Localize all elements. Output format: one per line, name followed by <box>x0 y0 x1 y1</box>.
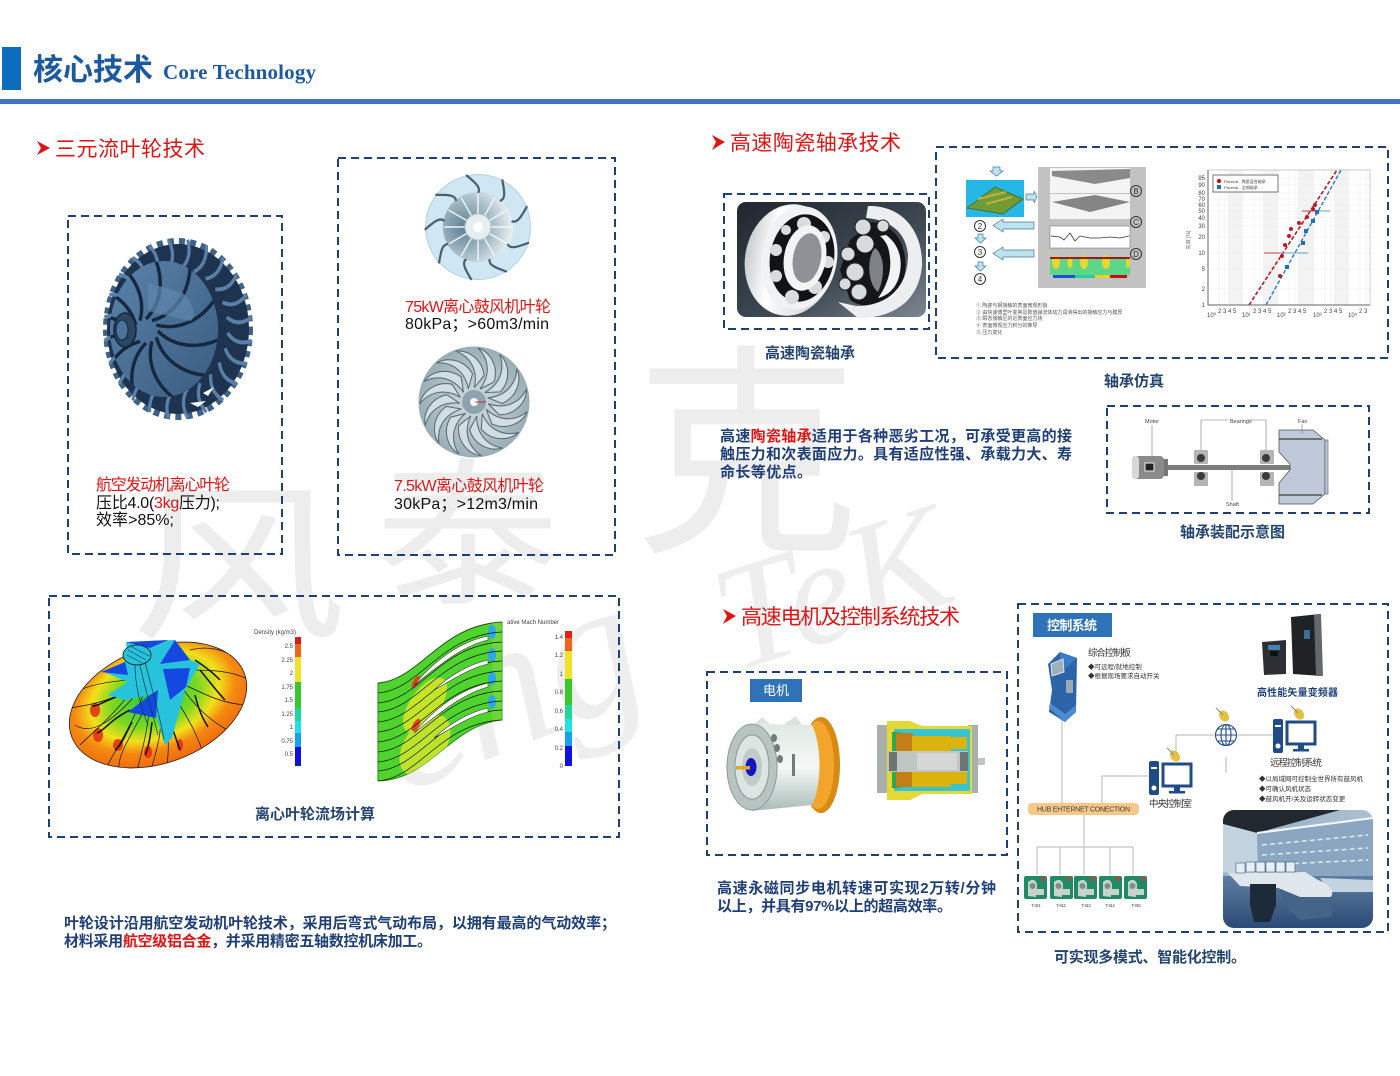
chart: Weibull life plot: 10⁴ <box>1348 312 1358 319</box>
chart: Weibull life plot: 10⁰ <box>1207 312 1217 319</box>
chart: Weibull life plot: 10 <box>1198 251 1206 257</box>
diagram: simulation workflow: D <box>1133 250 1139 259</box>
chart: relative Mach number contour <box>378 620 502 784</box>
chart: Weibull life plot <box>1185 170 1370 319</box>
text block: ceramic bearing advantages: 命长等优点。 <box>720 463 812 481</box>
caption: control summary: 可实现多模式、智能化控制。 <box>1054 948 1246 966</box>
text: simulation steps: ③ 瞬态接触区的近表面应力场 <box>976 315 1042 322</box>
icon: aero-engine centrifugal impeller <box>103 238 253 420</box>
chart: Weibull life plot: 失效 [%] <box>1185 230 1192 249</box>
legend: density: 1 <box>290 725 294 731</box>
legend: relative Mach number: 0.8 <box>555 690 564 696</box>
text block: impeller design: 材料采用航空级铝合金，并采用精密五轴数控机床加工。 <box>64 932 432 950</box>
chart: Weibull life plot: 70 <box>1198 197 1206 203</box>
label: hub ethernet <box>1028 803 1139 815</box>
watermark: 克 <box>634 331 859 583</box>
chart: density contour <box>68 640 248 768</box>
text block: ceramic bearing advantages <box>720 427 1072 481</box>
label: motor tag: 电机 <box>763 683 789 698</box>
caption: flow field: 离心叶轮流场计算 <box>255 805 375 823</box>
chart: Weibull life plot: 2 <box>1202 287 1206 293</box>
chart: Weibull life plot: 20 <box>1198 235 1206 241</box>
icon: blowers: T-B2 <box>1056 903 1066 908</box>
diagram: motor shaft bearings fan <box>1132 419 1328 508</box>
legend: density: 0.75 <box>281 739 294 745</box>
chart: Weibull life plot: 2 3 4 5 <box>1218 309 1237 315</box>
diagram: simulation workflow: B <box>1133 187 1139 196</box>
diagram: simulation workflow: 4 <box>978 275 983 284</box>
watermark: 泰 <box>375 447 560 626</box>
label: motor tag <box>750 679 802 702</box>
connection lines <box>1037 720 1273 875</box>
text: 75kW specs <box>405 298 551 333</box>
diagram: motor shaft bearings fan: Fan <box>1298 419 1307 425</box>
chart: Weibull life plot: 5 <box>1202 267 1206 273</box>
text: control board: ◆可远程/就地控制 <box>1088 662 1142 671</box>
text: 7.5kW specs: 7.5kW离心鼓风机叶轮 <box>394 477 544 495</box>
diagram: simulation workflow <box>966 167 1146 288</box>
legend: density: 1.5 <box>285 698 294 704</box>
diagram: motor shaft bearings fan: Shaft <box>1226 502 1239 508</box>
chart: Weibull life plot: 10³ <box>1313 313 1322 319</box>
legend: density: 0.5 <box>285 752 294 758</box>
chart: Weibull life plot: 2 3 <box>1359 309 1368 315</box>
watermark: 风 <box>130 472 346 662</box>
diagram: motor shaft bearings fan: Motor <box>1145 419 1159 425</box>
text: 7.5kW specs <box>394 477 544 513</box>
heading: motor and control technology: 高速电机及控制系统技术 <box>741 606 960 629</box>
photo: control room <box>1223 810 1373 928</box>
text: 7.5kW specs: 30kPa；>12m3/min <box>394 496 538 513</box>
icon: central computer <box>1149 748 1191 795</box>
legend: density: Density (kg/m3) <box>254 630 296 636</box>
legend: relative Mach number: 0.6 <box>555 709 564 715</box>
text block: motor description <box>717 879 996 915</box>
caption: bearing assembly: 轴承装配示意图 <box>1180 523 1285 541</box>
legend: density: 2.5 <box>285 644 294 650</box>
diagram: simulation workflow: 3 <box>978 248 983 257</box>
text: simulation steps: ⑤ 压力变化 <box>976 329 1002 336</box>
text: aero-engine impeller specs: 效率>85%; <box>96 511 174 529</box>
panel: ceramic bearing photo <box>724 194 929 329</box>
text: simulation steps: ② 由快速傅里叶变换及数值弹流体动力润滑得出的接触应力与膜厚 <box>976 309 1122 316</box>
text: simulation steps <box>976 302 1122 336</box>
legend: relative Mach number: 0.2 <box>555 746 564 752</box>
text: control board: ◆根据现场要求自动开关 <box>1088 671 1160 680</box>
diagram: simulation workflow: 2 <box>978 222 983 231</box>
legend: relative Mach number: 1.4 <box>555 635 564 641</box>
icon: globe <box>1216 708 1236 746</box>
header: 核心技术 <box>33 54 153 87</box>
text: control board <box>1088 647 1160 680</box>
legend: density: 2 <box>290 671 294 677</box>
photo: bearings <box>736 197 926 323</box>
chart: Weibull life plot: Parzival - 陶瓷混合轴承 <box>1224 178 1266 184</box>
chart: Weibull life plot: 2 3 4 5 <box>1324 309 1343 315</box>
legend: relative Mach number: 1 <box>560 672 564 678</box>
text: remote control system: ◆鼓风机开/关及运转状态变更 <box>1259 794 1346 803</box>
chart: Weibull life plot: 95 <box>1198 176 1206 182</box>
icon: 7.5kW impeller <box>417 344 532 459</box>
icon: blowers: T-B4 <box>1105 903 1115 908</box>
text: remote control system: ◆以局域网可控制全世界所有鼓风机 <box>1259 774 1364 783</box>
text: aero-engine impeller specs <box>96 476 230 529</box>
text: simulation steps: ① 陶瓷与钢接触的表面微观形貌 <box>976 302 1047 309</box>
legend: relative Mach number: 0 <box>560 764 564 770</box>
text: remote control system: 远程控制系统 <box>1270 757 1322 769</box>
chart: Weibull life plot: 90 <box>1198 183 1206 189</box>
text block: impeller design: 叶轮设计沿用航空发动机叶轮技术，采用后弯式气动布局，以拥有最高的气动效率； <box>64 914 616 932</box>
icon: remote computer <box>1273 706 1315 753</box>
chart: Weibull life plot: 2 3 4 5 <box>1253 309 1272 315</box>
chart: Weibull life plot: 2 3 4 5 <box>1288 309 1307 315</box>
text: 75kW specs: 75kW离心鼓风机叶轮 <box>405 298 551 316</box>
header <box>0 47 1400 104</box>
panel: motor <box>707 672 1007 855</box>
icon: 75kW impeller <box>425 174 530 280</box>
panel: aero-engine impeller <box>68 216 282 554</box>
chart: Weibull life plot: 80 <box>1198 191 1206 197</box>
diagram: simulation workflow: C <box>1133 218 1139 227</box>
caption: ceramic bearing: 高速陶瓷轴承 <box>765 344 855 362</box>
chart: Weibull life plot: 30 <box>1198 224 1206 230</box>
panel: control system <box>1018 604 1388 932</box>
panel: impeller flow field calculation <box>49 596 619 837</box>
legend: relative Mach number <box>507 620 572 770</box>
header: Core Technology <box>163 60 316 84</box>
panel: bearing simulation <box>936 147 1388 358</box>
text block: ceramic bearing advantages: 高速陶瓷轴承适用于各种恶劣工况，可承受更高的接 <box>720 427 1072 445</box>
panel: bearing assembly diagram <box>1107 406 1369 513</box>
legend: density <box>254 630 301 766</box>
chart: Weibull life plot: 40 <box>1198 216 1206 222</box>
label: hub ethernet: HUB EHTERNET CONECTION <box>1037 806 1130 814</box>
text: inverter label: 高性能矢量变频器 <box>1257 686 1338 699</box>
text: aero-engine impeller specs: 压比4.0(3kg压力); <box>96 494 220 512</box>
watermark: TeK <box>694 470 977 703</box>
text block: impeller design <box>64 914 616 950</box>
text block: motor description: 以上，并具有97%以上的超高效率。 <box>717 897 952 915</box>
text: control board: 综合控制板 <box>1088 647 1131 659</box>
heading: impeller technology: 三元流叶轮技术 <box>55 138 205 161</box>
chart: Weibull life plot: 10¹ <box>1242 313 1251 319</box>
text block: motor description: 高速永磁同步电机转速可实现2万转/分钟 <box>717 879 996 897</box>
icon: blowers: T-B3 <box>1081 903 1091 908</box>
icon: motor cross section <box>877 721 985 800</box>
heading: ceramic bearing technology: 高速陶瓷轴承技术 <box>730 132 901 155</box>
text: simulation steps: ④ 表面微观应力积分的推导 <box>976 322 1037 329</box>
label: control system tag <box>1033 613 1112 637</box>
text: central control room: 中央控制室 <box>1149 798 1192 810</box>
icon: blowers: T-B1 <box>1031 903 1041 908</box>
watermark <box>130 331 977 878</box>
legend: density: 2.25 <box>281 658 294 664</box>
chart: Weibull life plot: 10² <box>1277 313 1286 319</box>
legend: density: 1.25 <box>281 712 294 718</box>
legend: relative Mach number: 1.2 <box>555 653 564 659</box>
text: remote control system: ◆可确认风机状态 <box>1259 784 1312 793</box>
chart: Weibull life plot: 50 <box>1198 209 1206 215</box>
icon: motor exterior <box>727 716 840 813</box>
text: 75kW specs: 80kPa；>60m3/min <box>405 316 549 333</box>
watermark: Feng <box>228 536 671 878</box>
icon: blowers <box>1024 876 1147 908</box>
chart: Weibull life plot: 1 <box>1202 303 1206 309</box>
chart: Weibull life plot: Parzival - 全钢轴承 <box>1224 184 1258 190</box>
legend: density: 1.75 <box>281 685 294 691</box>
label: control system tag: 控制系统 <box>1047 618 1097 633</box>
panel: blower impellers <box>338 158 615 555</box>
chart: Weibull life plot: 60 <box>1198 203 1206 209</box>
diagram: motor shaft bearings fan: Bearings <box>1230 419 1252 425</box>
text: remote control system <box>1259 757 1364 803</box>
legend: relative Mach number: ative Mach Number <box>507 620 559 626</box>
icon: blowers: T-B5 <box>1131 903 1141 908</box>
text block: ceramic bearing advantages: 触压力和次表面应力。具有适应性强、承载力大、寿 <box>720 445 1072 463</box>
caption: bearing simulation: 轴承仿真 <box>1104 372 1164 390</box>
legend: relative Mach number: 0.4 <box>555 727 564 733</box>
icon: control kiosk <box>1048 652 1077 722</box>
text: aero-engine impeller specs: 航空发动机离心叶轮 <box>96 476 230 494</box>
icon: inverters <box>1262 614 1323 676</box>
